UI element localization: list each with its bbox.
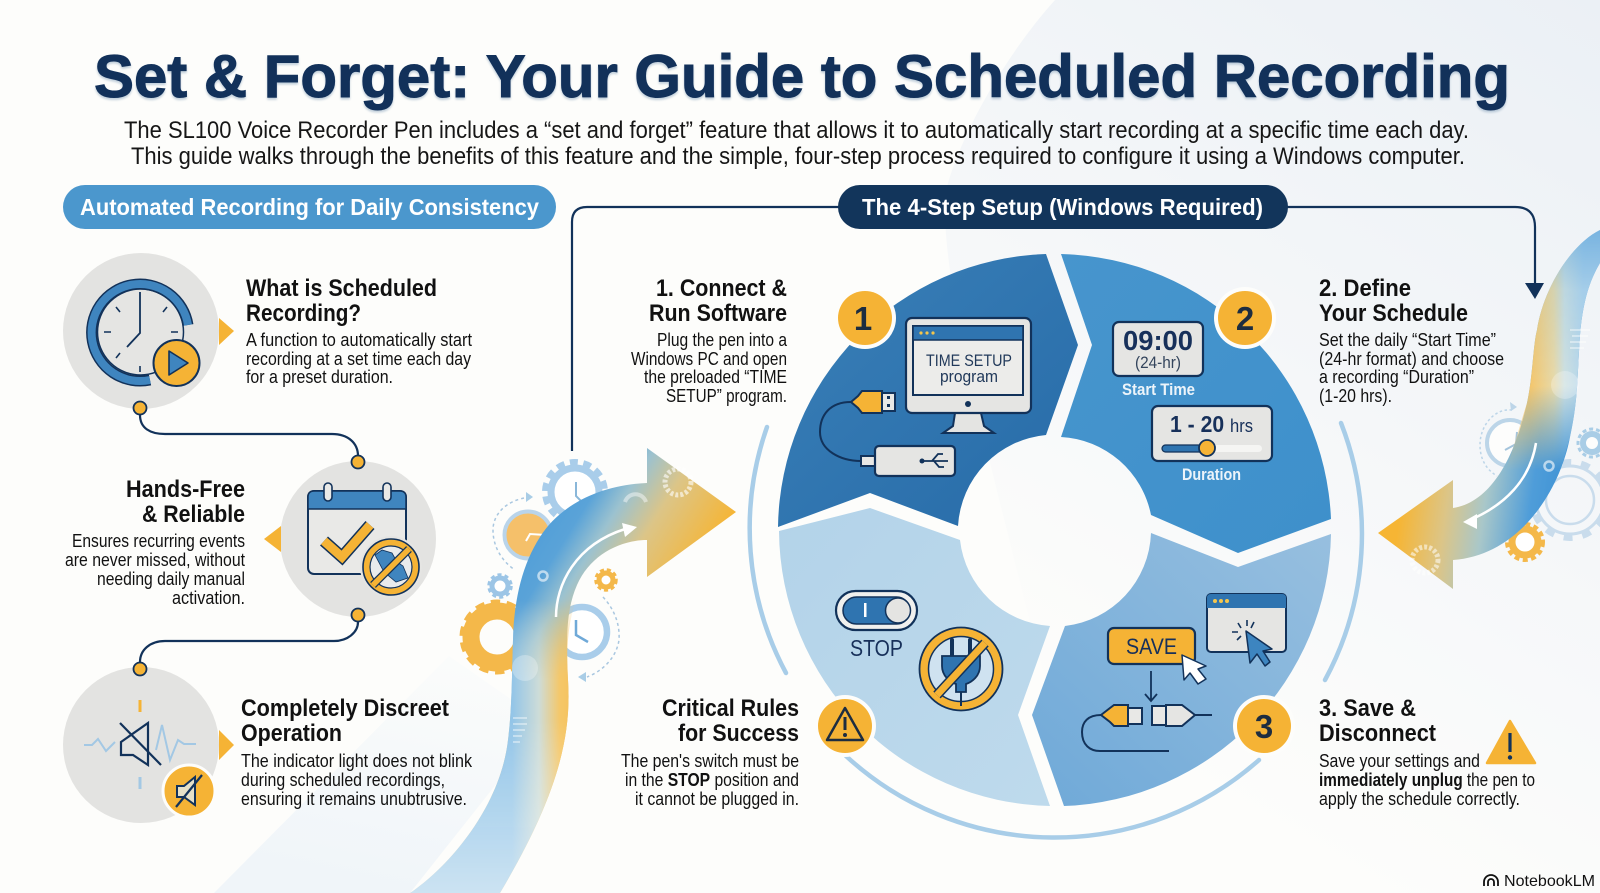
circle icon background xyxy=(264,461,436,617)
description: activation. xyxy=(172,588,245,608)
step 2 text: a recording “Duration” xyxy=(1319,367,1474,387)
start time display: Start Time xyxy=(1122,380,1195,399)
heading xyxy=(126,476,245,528)
step 1 text: Run Software xyxy=(649,300,787,327)
icon: mute badge xyxy=(163,765,215,817)
duration slider: Duration xyxy=(1182,465,1241,484)
description: needing daily manual xyxy=(97,569,245,589)
badge: step 2 xyxy=(1214,287,1276,349)
heading xyxy=(241,695,449,747)
step 2 text: (1-20 hrs). xyxy=(1319,386,1392,406)
badge: step 1: 1 xyxy=(854,300,872,337)
circle icon background xyxy=(63,667,234,823)
segment 3 xyxy=(1032,533,1331,806)
step 2 text: (24-hr format) and choose xyxy=(1319,349,1504,369)
step 3 text xyxy=(1319,695,1535,809)
duration slider xyxy=(1152,406,1272,484)
step 2 text: Your Schedule xyxy=(1319,300,1468,327)
step 1 text: 1. Connect & xyxy=(656,275,787,302)
badge: step 2: 2 xyxy=(1236,300,1254,337)
icon: TIME SETUP monitor: TIME SETUP xyxy=(926,351,1012,370)
heading pill: 4-step setup: The 4-Step Setup (Windows Required) xyxy=(862,194,1263,220)
panel: hands-free and reliable xyxy=(65,461,436,617)
critical rules text: The pen's switch must be xyxy=(621,751,799,771)
start time display: 09:00 xyxy=(1123,325,1193,356)
critical rules text: for Success xyxy=(678,720,799,747)
panel: completely discreet operation xyxy=(63,667,473,823)
heading: Hands-Free xyxy=(126,476,245,503)
heading pill: automated recording: Automated Recording for Daily Consistency xyxy=(80,194,539,220)
icon: no hands badge xyxy=(360,536,422,598)
critical rules text: in the STOP position and xyxy=(625,770,799,790)
NotebookLM logo: NotebookLM xyxy=(1504,873,1595,890)
badge: warning xyxy=(814,695,876,757)
step 1 text: the preloaded “TIME xyxy=(644,367,787,387)
icon: muted speaker with waves xyxy=(84,700,196,789)
connector: first to second benefit xyxy=(134,402,358,456)
start time display xyxy=(1113,322,1203,399)
step 3 text: 3. Save & xyxy=(1319,695,1416,722)
description xyxy=(246,330,472,387)
step 2 text xyxy=(1319,275,1504,406)
title: Set & Forget: Your Guide to Scheduled Recording xyxy=(94,43,1510,110)
step 1 text: Windows PC and open xyxy=(631,349,787,369)
step 1 text xyxy=(631,275,788,406)
icon: warning triangle xyxy=(1487,721,1535,763)
intro text: The SL100 Voice Recorder Pen includes a “set and forget” feature that allows it to automatically start recording at a specific time each day. xyxy=(124,117,1469,144)
step 3 text: apply the schedule correctly. xyxy=(1319,789,1520,809)
panel: what is scheduled recording xyxy=(63,253,472,409)
icon: no plugging in xyxy=(920,628,1002,710)
icon: save button: SAVE xyxy=(1126,634,1177,659)
segment 1 xyxy=(778,254,1078,527)
intro text xyxy=(124,117,1469,170)
segment 2 xyxy=(1061,254,1331,553)
description: during scheduled recordings, xyxy=(241,770,445,790)
heading pill: 4-step setup xyxy=(838,185,1288,229)
icon: disconnect cable xyxy=(1082,671,1212,751)
description: A function to automatically start xyxy=(246,330,472,350)
start time display: (24-hr) xyxy=(1135,353,1181,372)
step 3 text: Save your settings and xyxy=(1319,751,1480,771)
critical rules text: Critical Rules xyxy=(662,695,799,722)
icon: TIME SETUP monitor: program xyxy=(940,368,998,386)
heading: & Reliable xyxy=(142,501,245,528)
step 2 text: 2. Define xyxy=(1319,275,1411,302)
icon: save button xyxy=(1108,628,1206,684)
description: for a preset duration. xyxy=(246,367,393,387)
icon: USB cable and pen xyxy=(820,391,955,476)
flow connector line with arrow xyxy=(572,207,1544,451)
intro text: This guide walks through the benefits of this feature and the simple, four-step process required to configure it using a Windows computer. xyxy=(131,143,1465,170)
description: recording at a set time each day xyxy=(246,349,471,369)
icon: clock with play xyxy=(92,284,200,386)
connector dots on benefit circles xyxy=(134,456,364,676)
step 3 text: immediately unplug the pen to xyxy=(1319,770,1535,790)
segment 4 xyxy=(779,508,1050,806)
icon: stop switch: STOP xyxy=(850,635,903,661)
description: are never missed, without xyxy=(65,550,245,570)
step 1 text: SETUP” program. xyxy=(666,386,787,406)
icon: stop switch xyxy=(836,591,917,661)
connector: second to third benefit xyxy=(140,608,364,662)
icon: calendar with check xyxy=(308,483,406,574)
badge: step 1 xyxy=(834,287,896,349)
critical rules text xyxy=(621,695,799,809)
description: The indicator light does not blink xyxy=(241,751,473,771)
duration slider: 1 - 20 hrs xyxy=(1170,411,1253,437)
description: ensuring it remains unubtrusive. xyxy=(241,789,467,809)
step 1 text: Plug the pen into a xyxy=(657,330,788,350)
heading: Completely Discreet xyxy=(241,695,449,722)
panel: step wheel xyxy=(778,254,1331,806)
description xyxy=(241,751,473,809)
icon: program window xyxy=(1207,594,1286,666)
heading: Recording? xyxy=(246,300,361,327)
icon: TIME SETUP monitor xyxy=(906,318,1031,433)
heading xyxy=(246,275,437,327)
step 2 text: Set the daily “Start Time” xyxy=(1319,330,1496,350)
decorative swoosh arrow: right with gears and clocks xyxy=(1378,230,1600,589)
badge: step 3: 3 xyxy=(1255,708,1273,745)
heading: What is Scheduled xyxy=(246,275,437,302)
heading: Operation xyxy=(241,720,342,747)
critical rules text: it cannot be plugged in. xyxy=(635,789,799,809)
step 3 text: Disconnect xyxy=(1319,720,1436,747)
badge: step 3 xyxy=(1233,695,1295,757)
description: Ensures recurring events xyxy=(72,531,245,551)
outer ring arcs xyxy=(750,423,1362,837)
circle icon background xyxy=(63,253,234,409)
description xyxy=(65,531,245,608)
decorative swoosh arrow: left with gears and clocks xyxy=(410,448,736,893)
heading pill: automated recording xyxy=(63,185,556,229)
